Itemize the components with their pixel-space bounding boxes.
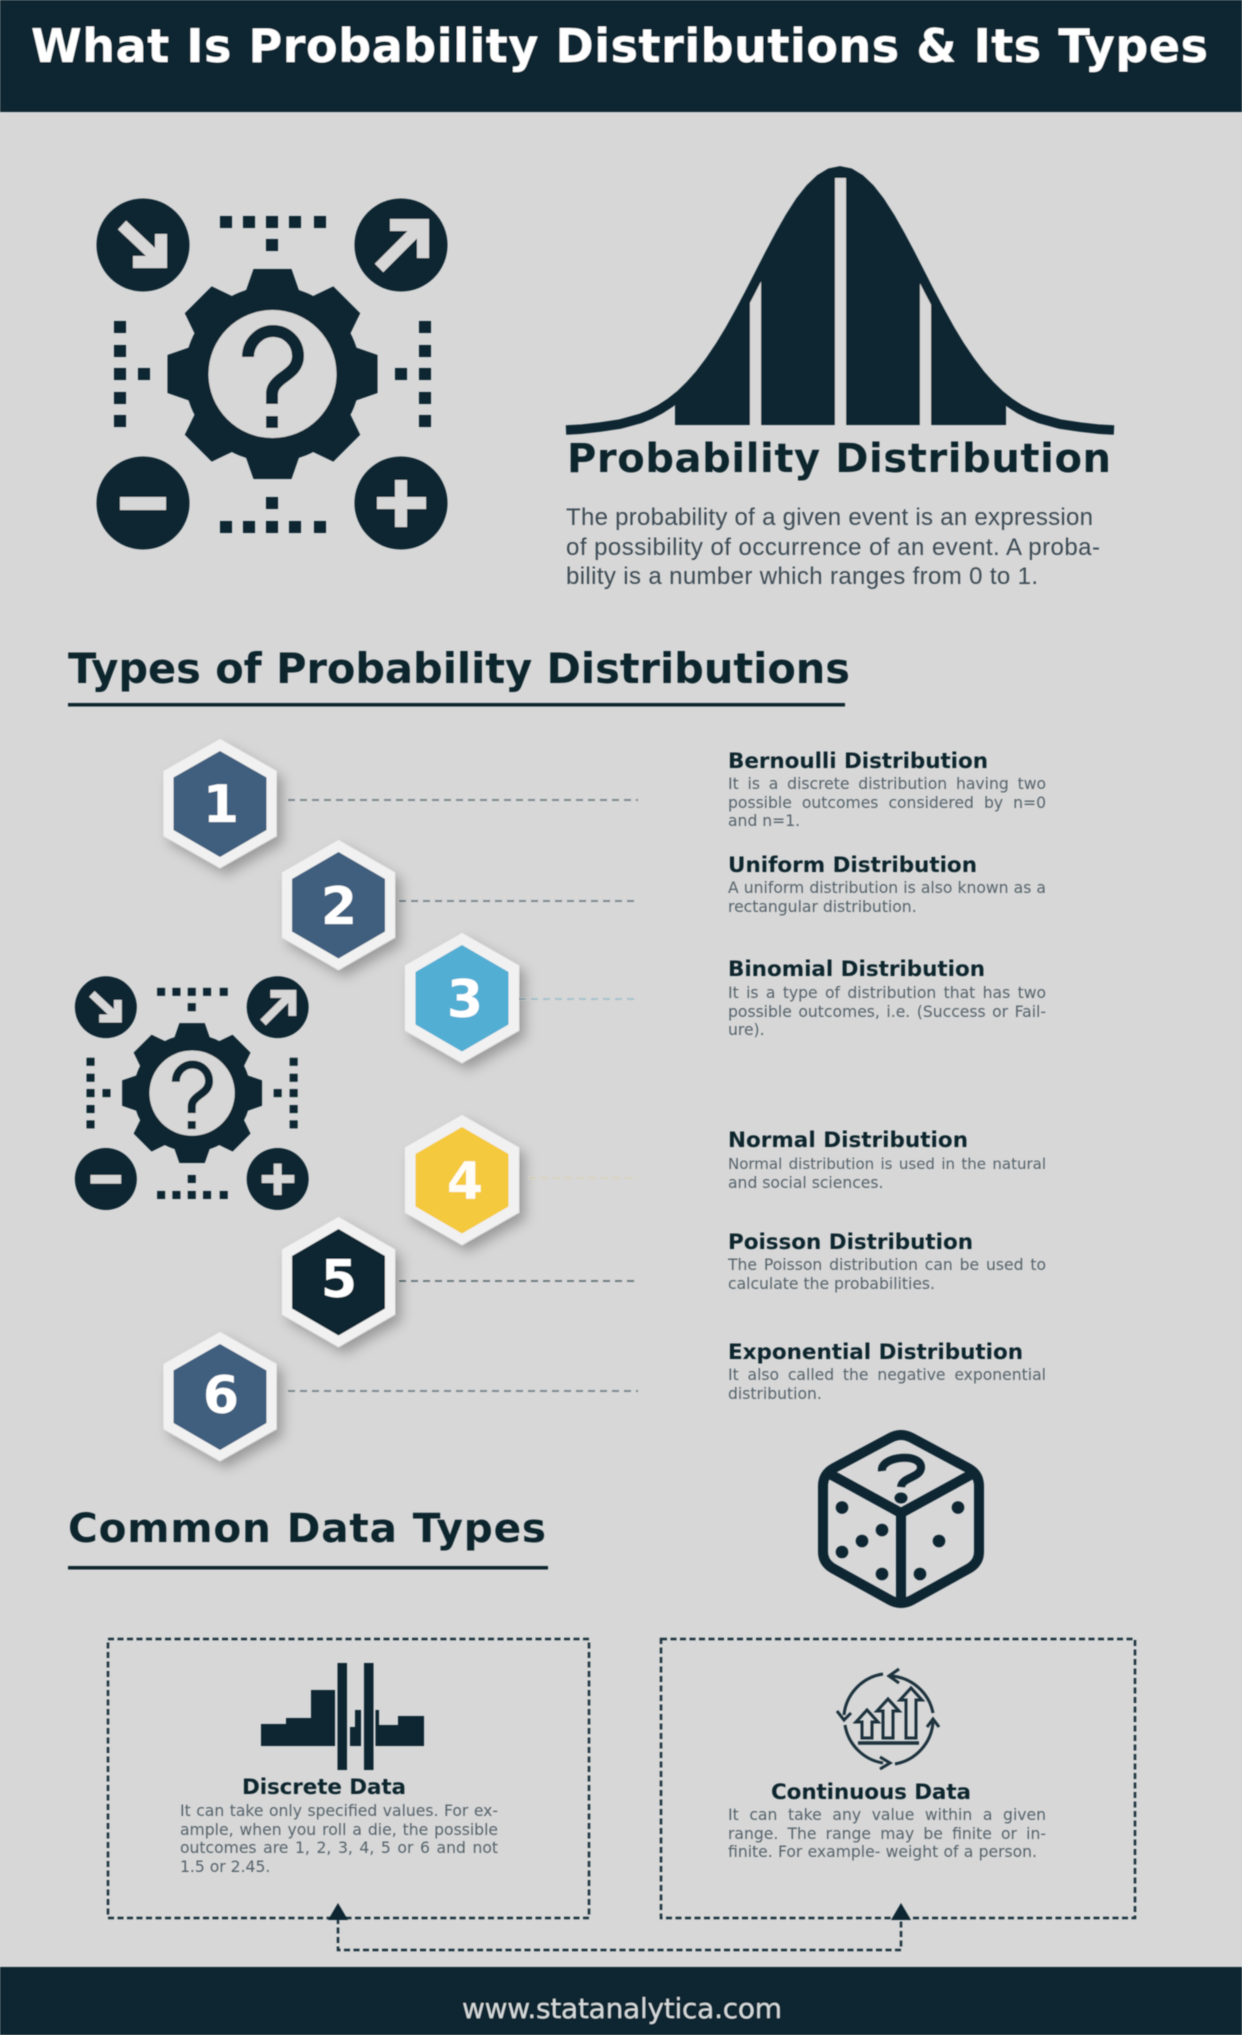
icon: top-left arrow circle [96,198,190,292]
heading: discrete data: Discrete Data [242,1775,406,1800]
heading: types of probability distributions: Types of Probability Distributions [68,644,850,693]
item: Binomial distribution: Binomial Distribution [728,957,985,982]
header band [0,0,1242,112]
item: Normal distribution: and social sciences. [728,1174,883,1192]
heading: probability distribution: Probability Distribution [567,436,1111,482]
hexagon 2 [282,840,395,970]
item: Exponential distribution: distribution. [728,1385,822,1403]
icon: discrete histogram [261,1663,424,1770]
text block: definition [566,504,1100,590]
item: Uniform distribution: Uniform Distribution [728,853,977,878]
hexagon 4: 4 [447,1152,483,1212]
icon: small gear with question mark [75,976,309,1210]
text: continuous data description: finite. For example- weight of a person. [728,1843,1037,1861]
item: Bernoulli distribution [728,749,1046,833]
panel: discrete data [108,1639,589,1918]
text: discrete data description: 1.5 or 2.45. [180,1858,270,1876]
footer band [0,1967,1242,2035]
icon: minus circle [96,456,190,550]
icon: top-right arrow circle [354,198,448,292]
item: Bernoulli distribution: Bernoulli Distribution [728,749,988,774]
hexagon 5: 5 [321,1250,357,1310]
title: What Is Probability Distributions & Its Types [31,19,1208,73]
icon: question mark [248,331,298,428]
hexagon 4 [405,1115,519,1245]
item: Normal distribution: Normal Distribution [728,1128,968,1153]
item: Uniform distribution: rectangular distribution. [728,898,917,916]
item: Binomial distribution: It is a type of distribution that has two [728,984,1046,1002]
hexagon 6: 6 [203,1366,239,1426]
icon: cycle with rising arrows [837,1669,939,1769]
hexagon 6 [164,1332,276,1461]
hexagon 2: 2 [321,877,357,937]
dashed leader lines [288,800,638,1391]
item: Bernoulli distribution: and n=1. [728,812,800,830]
icon: gear [168,269,378,479]
text block: definition: bility is a number which ranges from 0 to 1. [566,563,1038,590]
item: Exponential distribution: It also called the negative exponential [728,1366,1046,1384]
item: Normal distribution: Normal distribution is used in the natural [728,1155,1046,1173]
text: continuous data description [728,1806,1046,1866]
hexagon 1 [164,739,276,868]
icon: gear with question mark and operators [96,198,448,550]
item: Uniform distribution [728,853,1046,919]
icon: plus circle [354,456,448,550]
item: Poisson distribution: The Poisson distribution can be used to [728,1256,1046,1274]
chart: bell curve [566,171,1114,430]
dotted connectors [114,216,431,533]
footer url: www.statanalytica.com [462,1992,782,2025]
text: discrete data description: It can take only specified values. For ex- [180,1802,498,1820]
item: Poisson distribution: Poisson Distribution [728,1230,973,1255]
item: Binomial distribution: possible outcomes, i.e. (Success or Fail- [728,1003,1046,1021]
heading: continuous data: Continuous Data [771,1780,971,1805]
item: Normal distribution [728,1128,1046,1195]
hexagon 3: 3 [447,970,483,1030]
hexagon 5 [282,1217,395,1347]
text: continuous data description: It can take any value within a given [728,1806,1046,1824]
arrow: connector between panels [328,1903,911,1950]
item: Uniform distribution: A uniform distribution is also known as a [728,879,1046,897]
heading: common data types: Common Data Types [68,1504,546,1552]
text: discrete data description: ample, when you roll a die, the possible [180,1821,498,1839]
item: Bernoulli distribution: possible outcomes considered by n=0 [728,794,1046,812]
icon: dice [823,1435,979,1604]
text: discrete data description: outcomes are 1, 2, 3, 4, 5 or 6 and not [180,1839,498,1857]
item: Poisson distribution [728,1230,1046,1296]
item: Binomial distribution [728,957,1046,1042]
hexagon 1: 1 [203,775,239,835]
hexagon 3 [405,933,519,1063]
panel: continuous data [661,1639,1135,1918]
item: Bernoulli distribution: It is a discrete distribution having two [728,775,1046,793]
text block: definition: The probability of a given event is an expression [566,504,1093,531]
text: discrete data description [180,1802,498,1880]
text: continuous data description: range. The range may be finite or in- [728,1825,1046,1843]
item: Binomial distribution: ure). [728,1021,765,1039]
item: Exponential distribution: Exponential Distribution [728,1340,1023,1365]
text block: definition: of possibility of occurrence of an event. A proba- [566,534,1100,561]
item: Exponential distribution [728,1340,1046,1406]
item: Poisson distribution: calculate the probabilities. [728,1275,935,1293]
